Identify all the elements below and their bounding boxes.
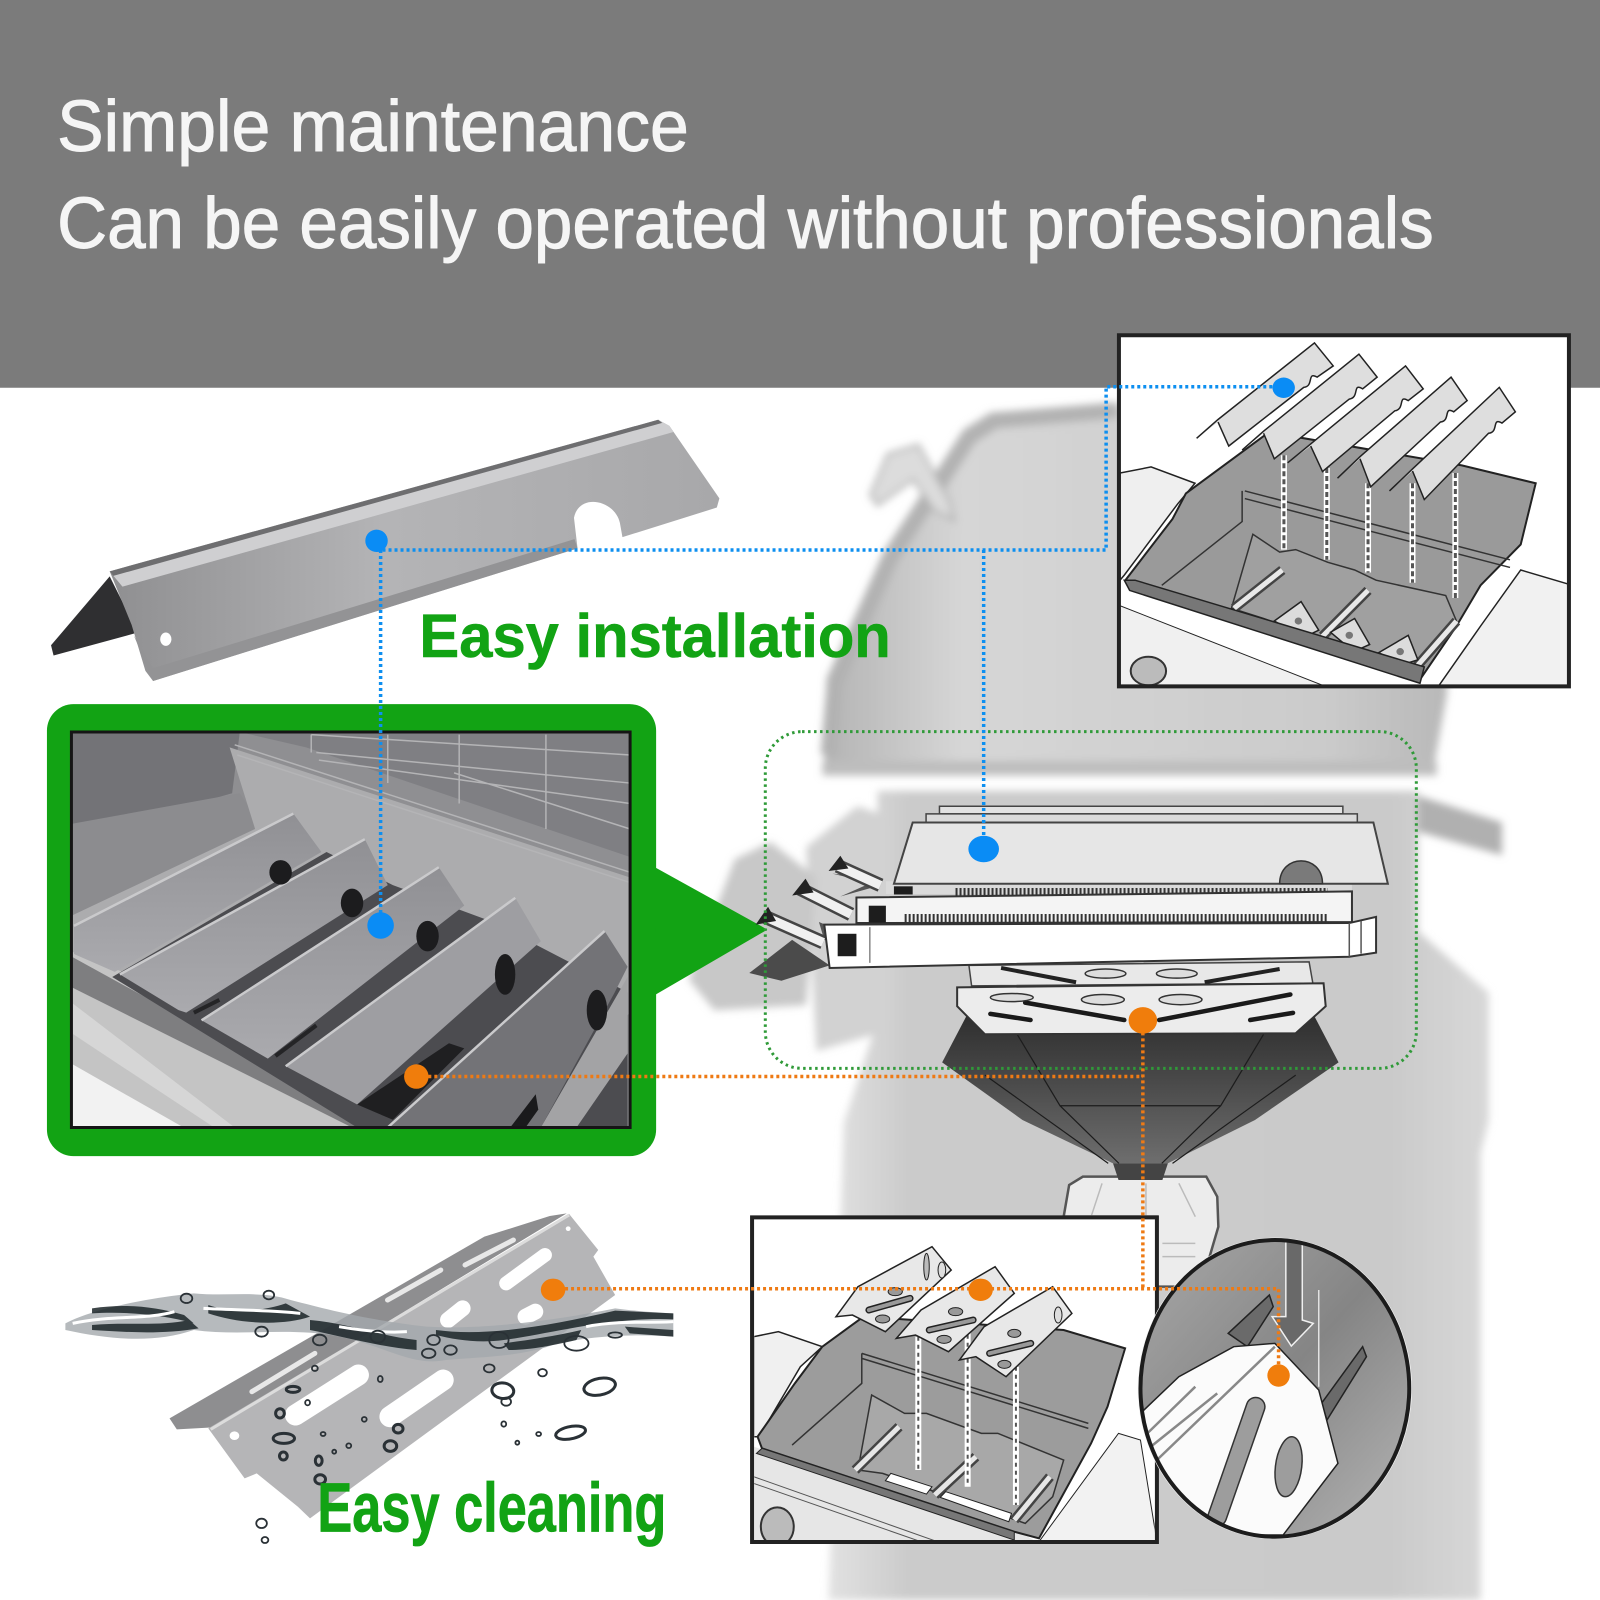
product: perforated plate in water [170,1213,615,1518]
valves and knobs [749,856,881,981]
gray header band [0,0,1600,388]
front flavor plate [957,983,1326,1034]
title: Can be easily operated without professionals [57,183,1434,264]
deflector 3 [1288,366,1423,472]
detail circle: plate placement [1138,1238,1412,1539]
dark drip funnel [942,1016,1339,1163]
inset: plates dropping into firebox [752,1217,1157,1546]
grill silhouette [689,404,1502,1600]
plate 1 [836,1247,951,1332]
deflector 1 [1197,343,1333,446]
water stream and droplets [65,1291,673,1543]
deflector 5 [1389,387,1515,500]
orange connector lines and dots [404,1007,1290,1387]
heading: easy installation: Easy installation [419,602,891,670]
flame deflector side view [894,806,1388,884]
diagram: exploded grill parts [749,806,1388,1163]
title: Simple maintenance [57,86,689,167]
rear burner grease plate [969,962,1313,986]
title [57,86,1434,264]
front burner tube [824,917,1376,968]
panel: photo of deflectors in grill [71,732,630,1127]
plate 3 [959,1287,1072,1377]
green dotted highlight box [765,732,1416,1068]
panel: green callout frame [47,704,767,1156]
drip pan below grill [1064,1163,1218,1287]
product: flame deflector bar [51,420,719,681]
blue connector lines and dots [365,378,1295,939]
heading: easy cleaning: Easy cleaning [317,1469,666,1547]
inset: deflectors dropping into firebox [1119,335,1569,687]
deflector 4 [1338,377,1467,487]
back burner tube [856,881,1352,923]
deflector 2 [1242,354,1377,459]
plate 2 [896,1267,1014,1352]
